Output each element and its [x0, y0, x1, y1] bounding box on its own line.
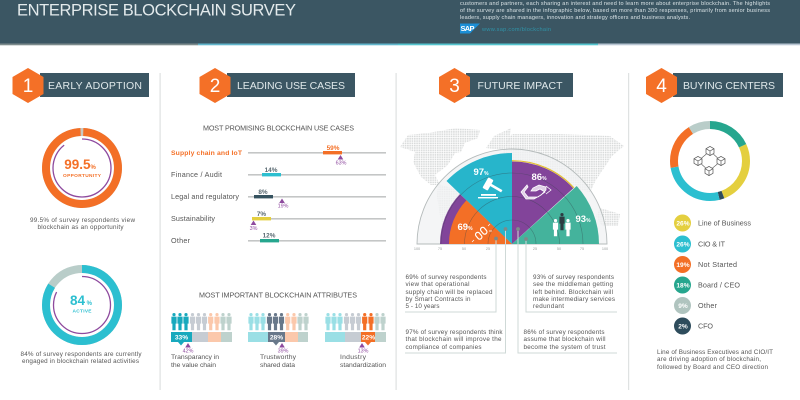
- legend: buying centers: Line of Business: [698, 218, 751, 228]
- section header 3: 3: [449, 76, 460, 97]
- radial sector: 97%: [446, 153, 512, 244]
- attribute chart: standardization: [325, 313, 386, 369]
- section header 1: 1: [23, 76, 33, 97]
- value labels: [457, 167, 591, 233]
- bar chart: use cases: Legal and regulatory: [171, 192, 239, 201]
- dotted world map: [400, 128, 624, 244]
- bar chart: use cases: 59%: [327, 145, 340, 152]
- donut chart: active: ACTIVE: [72, 308, 92, 314]
- header intro text: [460, 1, 770, 21]
- legend: buying centers: 9%: [678, 303, 688, 310]
- value labels: 97%: [473, 167, 489, 178]
- radial scale labels: 50: [557, 247, 561, 251]
- section header 1: [12, 68, 149, 103]
- radial sector: 86%: [512, 161, 573, 244]
- callout: 86% trust: 86% of survey respondents: [524, 329, 604, 336]
- attribute chart: transparency: the value chain: [171, 362, 216, 369]
- legend: buying centers: 26%: [676, 220, 690, 227]
- bar chart: use cases: 12%: [263, 232, 276, 240]
- bar chart: use cases: 19%: [278, 204, 289, 210]
- attribute chart: transparency: 42%: [183, 348, 194, 354]
- donut chart: active: 84 %: [70, 293, 93, 308]
- icon: gavel: [478, 177, 502, 198]
- callout: 69% operational supply chain: view that operational: [406, 281, 470, 288]
- section header 4: 4: [656, 76, 667, 97]
- bar chart: use cases: Supply chain and IoT: [171, 150, 243, 157]
- legend: buying centers: 26%: [676, 241, 690, 248]
- connector dots: [494, 227, 528, 241]
- callout: 93% middleman: [533, 274, 615, 310]
- bar chart: use cases: [171, 145, 386, 245]
- radial sector: 93%: [512, 186, 599, 244]
- value labels: 86%: [531, 172, 547, 183]
- heading: attributes: MOST IMPORTANT BLOCKCHAIN ATTRIBUTES: [199, 290, 357, 300]
- radial sector: 69%: [449, 200, 512, 244]
- caption: opportunity: 99.5% of survey respondents view: [30, 217, 135, 224]
- legend: buying centers: 2%: [678, 323, 688, 330]
- caption: active: engaged in blockchain related activities: [22, 358, 139, 365]
- callout: 86% trust: [524, 329, 606, 351]
- radial sector: purple left: [440, 194, 512, 244]
- attribute chart: transparency: 33%: [175, 334, 188, 342]
- attribute chart: trustworthy: [248, 313, 309, 369]
- radial scale labels: 25: [486, 247, 490, 251]
- donut chart: opportunity: 99.5%: [64, 157, 96, 172]
- callout: 69% operational supply chain: 5 - 10 years: [406, 303, 440, 310]
- attribute chart: transparency: [171, 313, 232, 369]
- caption: opportunity: [30, 217, 135, 231]
- attribute chart: trustworthy: 28%: [270, 334, 283, 342]
- heading: use cases: MOST PROMISING BLOCKCHAIN USE CASES: [203, 124, 354, 132]
- legend: buying centers: Not Started: [698, 260, 737, 269]
- section header 1: EARLY ADOPTION: [48, 80, 142, 92]
- caption: buying centers: followed by Board and CEO direction: [657, 364, 768, 371]
- radial scale labels: 50: [462, 247, 466, 251]
- attribute chart: standardization: 13%: [358, 348, 369, 354]
- legend: buying centers: Other: [698, 301, 718, 310]
- radial scale labels: [414, 247, 608, 251]
- legend: buying centers: Board / CEO: [698, 280, 740, 290]
- yellow arc: [512, 161, 574, 188]
- radial scale labels: 75: [580, 247, 584, 251]
- section header 4: [646, 68, 783, 103]
- callout connector lines: [405, 229, 617, 353]
- attribute chart: standardization: standardization: [340, 362, 386, 369]
- header intro text: leaders, supply chain managers, innovation and strategy officers and business analysts.: [460, 15, 690, 21]
- header link: www.sap.com/blockchain: [481, 27, 551, 33]
- caption: buying centers: are driving adoption of blockchain,: [657, 356, 761, 363]
- section header 2: LEADING USE CASES: [237, 80, 345, 92]
- header intro text: of the survey are shared in the infographic below, based on more than 300 responses, primarily from senior business: [460, 8, 770, 14]
- radial scale labels: 25: [533, 247, 537, 251]
- caption: active: [20, 351, 142, 365]
- attribute chart: standardization: Industry: [340, 354, 367, 361]
- donut chart: opportunity: OPPORTUNITY: [63, 173, 102, 179]
- section header 4: BUYING CENTERS: [683, 80, 775, 92]
- attribute chart: standardization: 22%: [362, 334, 375, 342]
- callout: 97% compliance: 97% of survey respondents think: [406, 329, 503, 336]
- bar chart: use cases: Finance / Audit: [171, 170, 222, 179]
- callout: 93% middleman: see the middleman getting: [533, 281, 613, 288]
- callout: 69% operational supply chain: by Smart Contracts in: [406, 296, 471, 303]
- header intro text: customers and partners, each sharing an interest and need to learn more about enterprise blockchain. The highlights: [460, 1, 770, 7]
- callout: 93% middleman: make intermediary services: [533, 296, 615, 303]
- legend: buying centers: 19%: [676, 262, 690, 269]
- section header 2: 2: [210, 76, 220, 97]
- legend: buying centers: CIO & IT: [698, 240, 726, 248]
- radial scale labels: 100: [602, 247, 608, 251]
- bar chart: use cases: 63%: [336, 160, 347, 166]
- icon: broken chain: [472, 224, 492, 242]
- bar chart: use cases: Sustainability: [171, 214, 215, 223]
- radial scale labels: 75: [438, 247, 442, 251]
- caption: buying centers: [657, 349, 773, 371]
- bar chart: use cases: 8%: [258, 189, 268, 196]
- donut chart: active: [46, 269, 118, 341]
- section header 2: [200, 68, 355, 103]
- attribute chart: trustworthy: 39%: [278, 348, 289, 354]
- caption: buying centers: Line of Business Executives and CIO/IT: [657, 349, 773, 356]
- callout: 69% operational supply chain: [406, 274, 493, 310]
- bar chart: use cases: 14%: [265, 167, 278, 174]
- radial scale rings: [441, 173, 583, 244]
- donut chart: opportunity: [45, 131, 119, 205]
- icon: SAP logo: SAP: [460, 24, 474, 33]
- attribute chart: trustworthy: Trustworthy: [260, 354, 297, 361]
- callout: 93% middleman: 93% of survey respondents: [533, 274, 614, 281]
- icon: blockchain cubes: [693, 146, 726, 176]
- donut chart: buying centers: [674, 125, 746, 197]
- section header 3: FUTURE IMPACT: [478, 80, 563, 92]
- legend: buying centers: 18%: [676, 282, 690, 289]
- callout: 69% operational supply chain: 69% of survey respondents: [406, 274, 486, 281]
- callout: 93% middleman: left behind. Blockchain will: [533, 289, 613, 296]
- icon: people: [553, 213, 571, 236]
- attribute chart: trustworthy: shared data: [260, 362, 295, 369]
- attribute chart: transparency: Transparancy in: [171, 354, 219, 361]
- icon: SAP logo: [460, 24, 480, 34]
- icon: handshake: [521, 185, 551, 199]
- header band: [0, 0, 800, 45]
- bar chart: use cases: 3%: [250, 226, 258, 232]
- bar chart: use cases: 7%: [257, 211, 266, 218]
- section dividers: [160, 73, 629, 390]
- radial scale labels: 100: [414, 247, 420, 251]
- callout: 86% trust: assume that blockchain will: [524, 336, 606, 343]
- caption: opportunity: blockchain as an opportunity: [38, 224, 124, 231]
- bar chart: use cases: Other: [171, 236, 191, 245]
- title: ENTERPRISE BLOCKCHAIN SURVEY: [17, 2, 296, 20]
- legend: buying centers: [674, 214, 751, 334]
- legend: buying centers: CFO: [698, 322, 713, 330]
- value labels: 69%: [457, 222, 473, 233]
- callout: 97% compliance: [406, 329, 503, 351]
- callout: 69% operational supply chain: supply chain will be replaced: [406, 289, 493, 296]
- callout: 86% trust: become the system of trust: [524, 344, 606, 351]
- callout: 97% compliance: that blockchain will improve the: [406, 336, 502, 343]
- callout: 93% middleman: redundant: [533, 303, 564, 310]
- caption: active: 84% of survey respondents are currently: [20, 351, 142, 358]
- radial chart: future impact: [405, 149, 617, 353]
- section header 3: [439, 68, 573, 103]
- value labels: 93%: [575, 214, 591, 225]
- callout: 97% compliance: compliance of companies: [406, 344, 482, 351]
